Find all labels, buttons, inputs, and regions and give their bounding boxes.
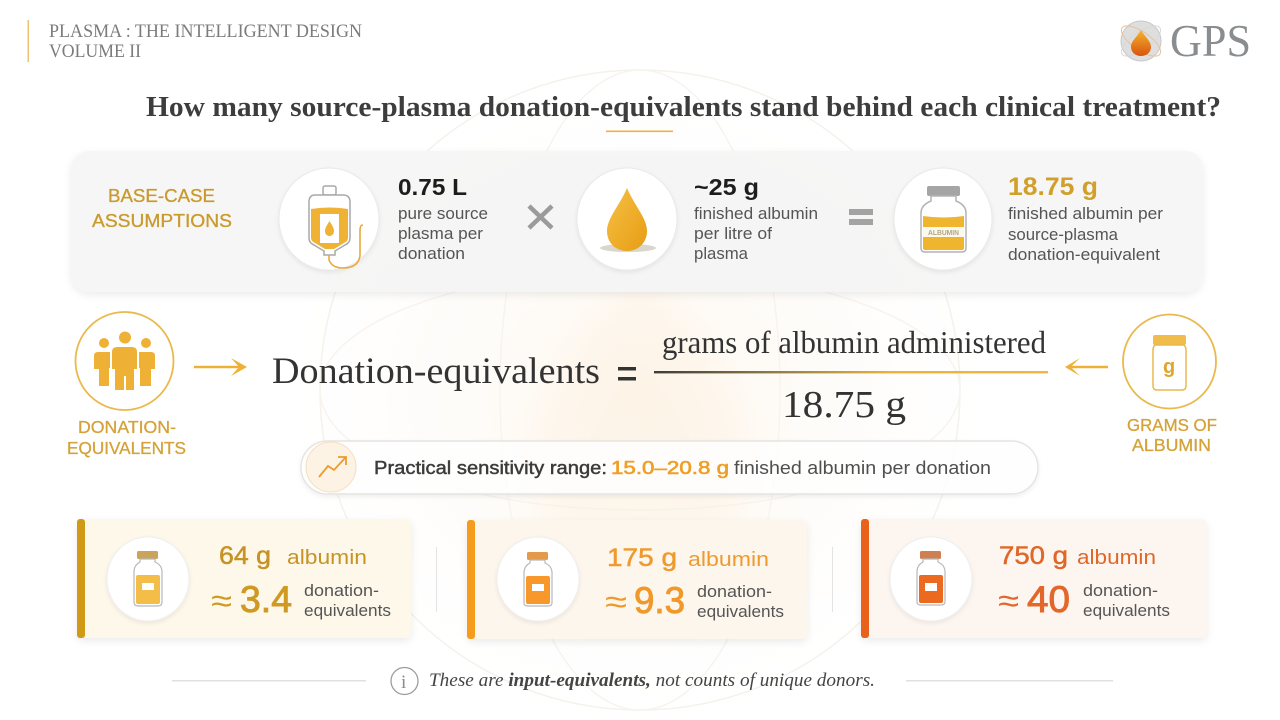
card: 64 g albumin: ≈ bbox=[211, 582, 232, 619]
logo: GPS: GPS bbox=[1170, 15, 1251, 66]
equals sign bbox=[849, 209, 873, 225]
label: donation-equivalents bbox=[67, 417, 186, 458]
formula bbox=[272, 324, 1048, 426]
text: plasma per donation: plasma per bbox=[398, 225, 484, 243]
card: 750 g albumin: albumin bbox=[1077, 546, 1156, 569]
footnote: These are input-equivalents, not counts of unique donors. bbox=[429, 671, 875, 691]
text: plasma per donation: pure source bbox=[398, 205, 488, 223]
icon: plasma drop bbox=[577, 168, 677, 270]
icon: albumin bottle bbox=[894, 168, 992, 270]
text: albumin per litre: ~25 g bbox=[694, 174, 759, 200]
label: grams of albumin bbox=[1127, 415, 1217, 455]
text: albumin per litre bbox=[694, 174, 818, 263]
callout: sensitivity range: Practical sensitivity range: bbox=[374, 458, 607, 478]
label: donation-equivalents: DONATION- bbox=[78, 417, 176, 437]
text: plasma per donation: donation bbox=[398, 245, 465, 263]
card: 64 g albumin: 64 g bbox=[219, 542, 271, 570]
text: albumin per litre: finished albumin bbox=[694, 205, 818, 223]
card: 750 g albumin: equivalents bbox=[1083, 602, 1170, 620]
card: 175 g albumin: albumin bbox=[688, 548, 769, 571]
callout: sensitivity range: finished albumin per donation bbox=[734, 458, 991, 478]
text: plasma per donation bbox=[398, 174, 488, 263]
text: albumin per donation-equivalent: donation-equivalent bbox=[1008, 246, 1160, 264]
card: 64 g albumin: equivalents bbox=[304, 602, 391, 620]
icon: plasma bag bbox=[279, 168, 379, 270]
icon: vial bbox=[497, 537, 579, 621]
card: 750 g albumin: ≈ bbox=[998, 582, 1019, 619]
divider bbox=[436, 547, 437, 612]
card: 175 g albumin: equivalents bbox=[697, 603, 784, 621]
card: 64 g albumin bbox=[77, 519, 411, 638]
card: 175 g albumin: 9.3 bbox=[634, 580, 685, 621]
icon: albumin bottle: ALBUMIN bbox=[928, 230, 959, 237]
background watermark: globe and drop bbox=[260, 70, 1020, 720]
logo: GPS bbox=[1117, 15, 1251, 66]
text: albumin per donation-equivalent: finished albumin per bbox=[1008, 205, 1164, 223]
heading: base-case assumptions: BASE-CASE bbox=[108, 186, 215, 206]
formula: Donation-equivalents bbox=[272, 351, 600, 392]
icon: grams of albumin bbox=[1123, 314, 1216, 408]
footnote bbox=[172, 668, 1113, 694]
icon: donors group bbox=[76, 312, 174, 410]
label: grams of albumin: ALBUMIN bbox=[1132, 435, 1211, 455]
heading: base-case assumptions bbox=[92, 186, 232, 231]
multiply sign bbox=[529, 206, 552, 228]
text: albumin per donation-equivalent bbox=[1008, 173, 1164, 264]
title: How many source-plasma donation-equivalents stand behind each clinical treatment? bbox=[146, 92, 1221, 123]
callout: sensitivity range: 15.0–20.8 g bbox=[611, 458, 729, 478]
panel: base-case assumptions bbox=[71, 151, 1203, 292]
icon: vial bbox=[107, 537, 189, 621]
card: 750 g albumin bbox=[861, 519, 1207, 638]
text: plasma per donation: 0.75 L bbox=[398, 174, 467, 200]
card: 750 g albumin: donation- bbox=[1083, 582, 1158, 600]
label: grams of albumin: GRAMS OF bbox=[1127, 415, 1217, 435]
icon: vial bbox=[890, 537, 972, 621]
header: publication name: VOLUME II bbox=[49, 42, 141, 62]
card: 175 g albumin bbox=[467, 520, 807, 639]
icon: grams of albumin: g bbox=[1163, 356, 1175, 378]
heading: base-case assumptions: ASSUMPTIONS bbox=[92, 211, 232, 231]
label: donation-equivalents: EQUIVALENTS bbox=[67, 438, 186, 458]
callout: sensitivity range bbox=[301, 441, 1038, 494]
card: 175 g albumin: donation- bbox=[697, 583, 772, 601]
divider bbox=[832, 547, 833, 612]
header: publication name: PLASMA : THE INTELLIGENT DESIGN bbox=[49, 22, 362, 42]
text: albumin per donation-equivalent: source-plasma bbox=[1008, 226, 1119, 244]
card: 750 g albumin: 40 bbox=[1027, 579, 1070, 620]
text: albumin per donation-equivalent: 18.75 g bbox=[1008, 173, 1098, 201]
card: 64 g albumin: 3.4 bbox=[240, 579, 292, 620]
card: 175 g albumin: 175 g bbox=[607, 544, 677, 572]
formula: 18.75 g bbox=[782, 384, 906, 426]
text: albumin per litre: plasma bbox=[694, 245, 749, 263]
header: publication name bbox=[28, 20, 362, 62]
footnote: i bbox=[401, 672, 406, 693]
arrow: donors to formula bbox=[194, 358, 247, 376]
card: 750 g albumin: 750 g bbox=[999, 542, 1068, 570]
formula: grams of albumin administered bbox=[662, 324, 1046, 360]
text: albumin per litre: per litre of bbox=[694, 225, 772, 243]
card: 175 g albumin: ≈ bbox=[605, 583, 627, 620]
card: 64 g albumin: donation- bbox=[304, 582, 379, 600]
card: 64 g albumin: albumin bbox=[287, 546, 367, 569]
arrow: albumin to formula bbox=[1065, 358, 1108, 376]
icon: trend arrow bbox=[306, 442, 356, 492]
